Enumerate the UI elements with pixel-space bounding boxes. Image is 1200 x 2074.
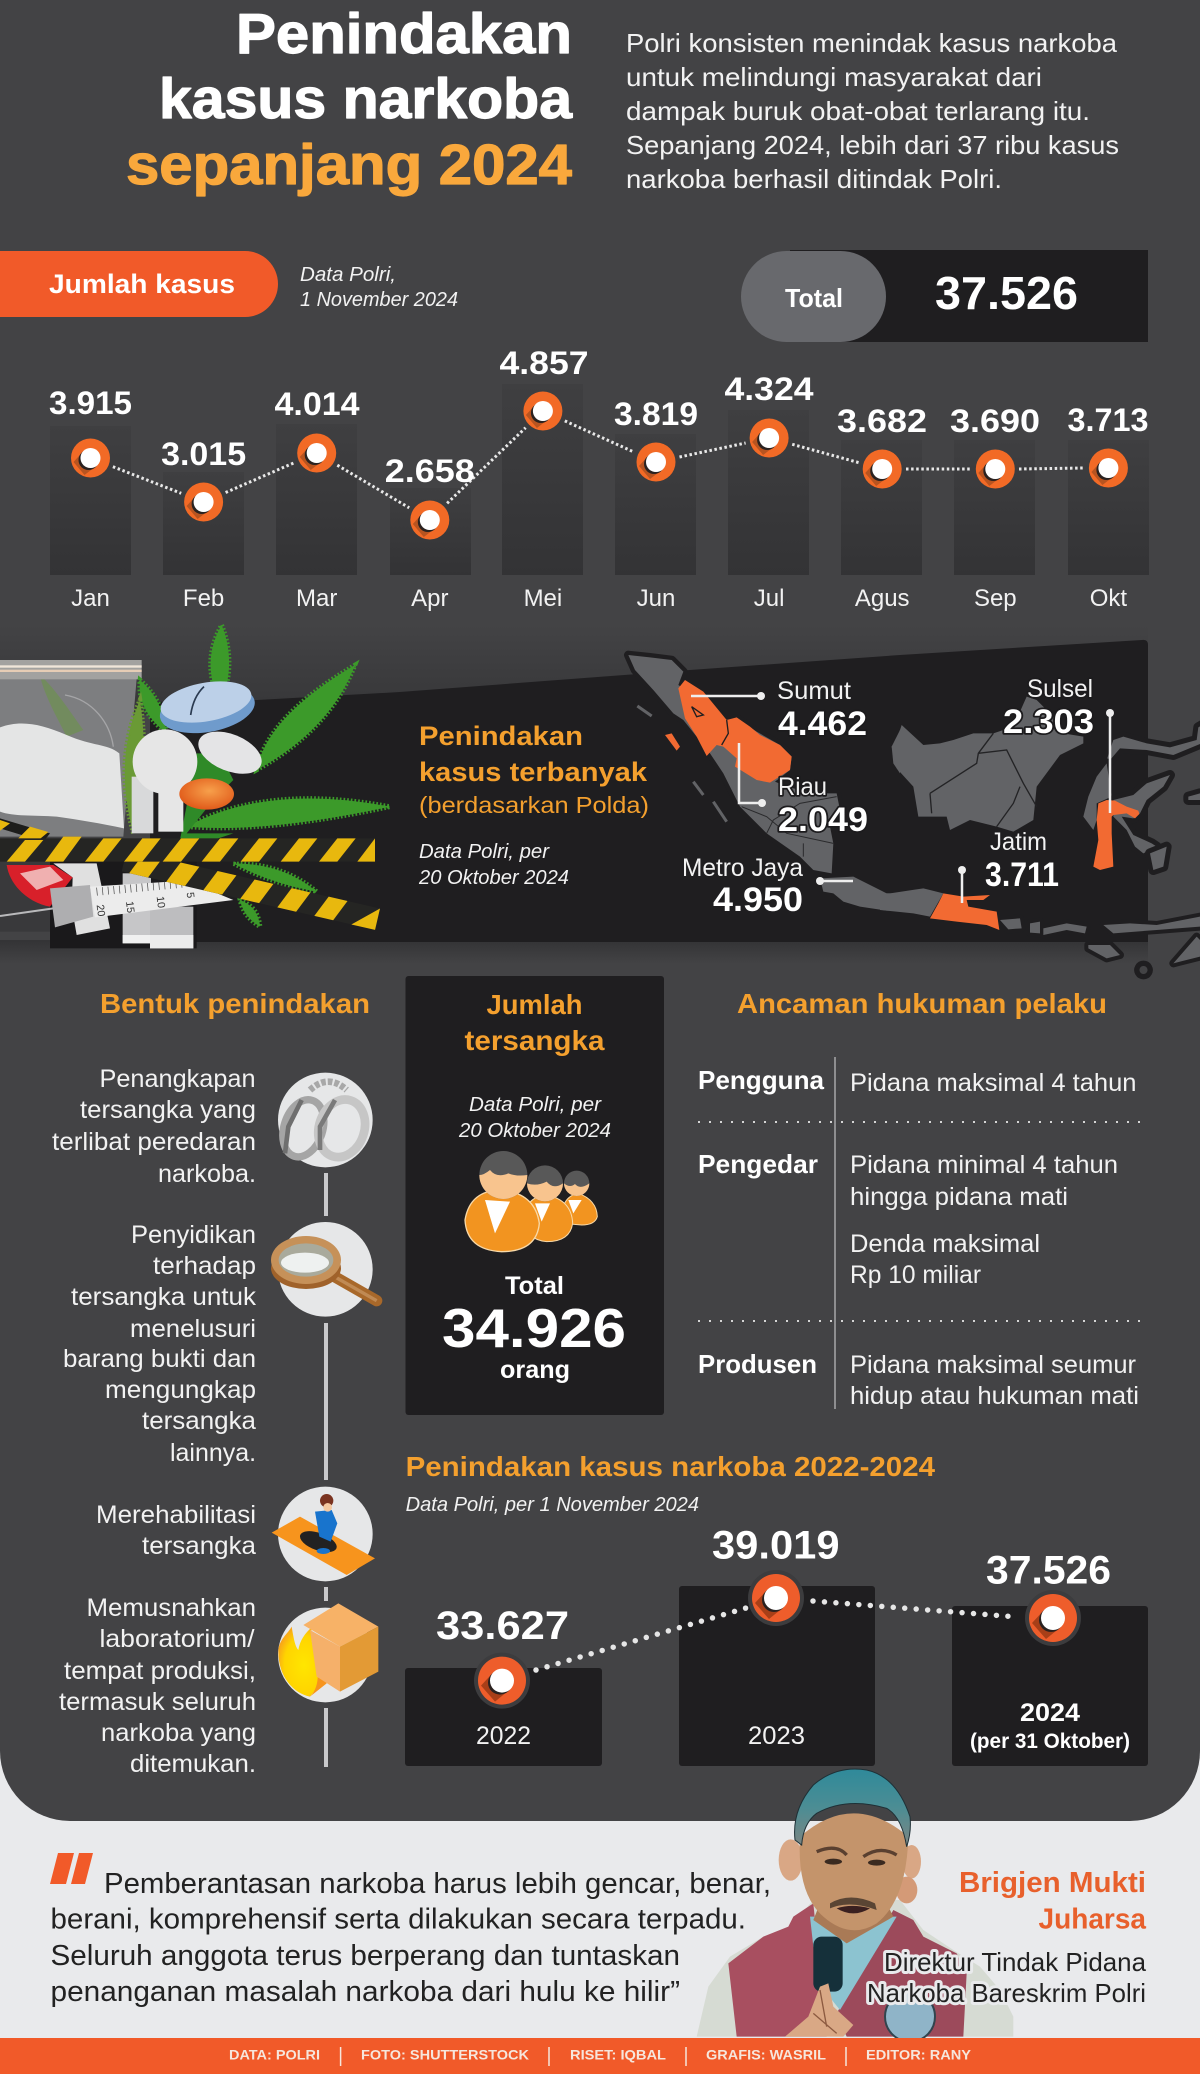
- monthly values: 3.819: [614, 396, 698, 432]
- penalties table: [698, 1057, 1146, 1410]
- panel heading: tersangka: [464, 1025, 605, 1056]
- text: Penyidikan: menelusuri: [130, 1315, 256, 1343]
- text: Memusnahkan: Memusnahkan: [86, 1594, 256, 1622]
- highlighted province: Sumut and Riau: [678, 680, 792, 783]
- text: Penyidikan: tersangka untuk: [71, 1283, 257, 1311]
- text: Penangkapan: Penangkapan: [100, 1065, 255, 1093]
- heading: Bentuk penindakan: Bentuk penindakan: [100, 988, 370, 1019]
- yearly values: [436, 1524, 1111, 1648]
- callout: Sulsel: [1003, 675, 1114, 813]
- title: sepanjang 2024: [126, 133, 572, 197]
- footer credits bar: GRAFIS: WASRIL: [706, 2046, 826, 2062]
- map of Indonesia: [628, 655, 1200, 977]
- police tape upper: [0, 818, 375, 862]
- chart bars: [50, 384, 1149, 575]
- speaker name: [959, 1867, 1147, 1936]
- callout: Riau: Riau: [778, 773, 827, 801]
- text: Penangkapan: tersangka yang: [80, 1096, 256, 1124]
- highlighted province: Jatim: [930, 893, 999, 930]
- capsule, vials and syringe: 20: [94, 904, 107, 917]
- heading: Penindakan kasus narkoba 2022-2024: Data Polri, per 1 November 2024: [406, 1494, 699, 1516]
- intro paragraph: narkoba berhasil ditindak Polri.: [626, 164, 1002, 194]
- quote text: Seluruh anggota terus berperang dan tuntaskan: [50, 1940, 680, 1972]
- text: Penyidikan: mengungkap: [105, 1376, 256, 1404]
- hair: [795, 1769, 910, 1847]
- title: [126, 2, 573, 197]
- illustration: drugs, syringe and police tape: [0, 625, 390, 948]
- title: Penindakan: [236, 2, 572, 66]
- callout: Metro Jaya: [682, 854, 853, 919]
- portrait: Brigjen Mukti Juharsa: [697, 1769, 1013, 2042]
- total badge: Total: [785, 283, 843, 313]
- text: Memusnahkan: [59, 1594, 256, 1778]
- dotted trend line: [113, 421, 1084, 508]
- month labels: Agus: [855, 585, 910, 612]
- highlighted province: Sulsel: [1093, 800, 1139, 870]
- year labels: 2022: [476, 1722, 531, 1750]
- capsule, vials and syringe: 15: [123, 901, 136, 914]
- row: Produsen: Pidana maksimal seumur: [850, 1351, 1136, 1379]
- panel data source note: [458, 1094, 611, 1142]
- text: Merehabilitasi: [96, 1501, 256, 1560]
- callout: Sumut: 4.462: [778, 705, 867, 743]
- data source note: 1 November 2024: [300, 289, 458, 311]
- speaker role: Direktur Tindak Pidana: [884, 1947, 1147, 1977]
- row: Pengedar: Pengedar: [698, 1149, 818, 1179]
- month labels: Jan: [71, 585, 110, 612]
- heading: Penindakan kasus terbanyak: (berdasarkan Polda): [419, 792, 649, 818]
- islands: Sumatra and west Java: [628, 655, 900, 911]
- row: Pengguna: Pengguna: [698, 1065, 825, 1095]
- text: Memusnahkan: ditemukan.: [130, 1750, 256, 1778]
- row: Produsen: hidup atau hukuman mati: [850, 1382, 1139, 1410]
- title: kasus narkoba: [159, 67, 573, 131]
- icon: rehabilitation figure on mat: [272, 1487, 375, 1581]
- intro paragraph: Sepanjang 2024, lebih dari 37 ribu kasus: [626, 130, 1119, 160]
- quote text: berani, komprehensif serta dilakukan secara terpadu.: [50, 1904, 746, 1936]
- total badge: [741, 250, 1148, 342]
- ears and hand: [779, 1839, 803, 1881]
- text: Memusnahkan: tempat produksi,: [64, 1657, 256, 1685]
- label pill: Jumlah kasus: Jumlah kasus: [49, 269, 235, 299]
- year labels: 2023: [748, 1722, 805, 1750]
- monthly values: [49, 345, 1148, 489]
- speaker name: Juharsa: [1038, 1904, 1147, 1936]
- speaker role: Narkoba Bareskrim Polri: [867, 1978, 1146, 2008]
- heading: Penindakan kasus terbanyak: [419, 721, 649, 818]
- total badge: 37.526: [935, 267, 1078, 319]
- callout: Sumut: Sumut: [777, 677, 851, 705]
- icon: magnifying glass: [271, 1222, 377, 1317]
- text: Penangkapan: [52, 1065, 256, 1188]
- heading: Penindakan kasus narkoba 2022-2024: Penindakan kasus narkoba 2022-2024: [406, 1451, 935, 1482]
- row: Produsen: Produsen: [698, 1349, 817, 1379]
- month labels: Sep: [974, 585, 1017, 612]
- eyes, mustache and mouth: [817, 1848, 897, 1857]
- text: Penangkapan: terlibat peredaran: [52, 1128, 256, 1156]
- row: Pengedar: Rp 10 miliar: [850, 1261, 981, 1289]
- text: Penyidikan: barang bukti dan: [63, 1345, 256, 1373]
- cannabis leaves: [125, 625, 390, 927]
- yearly values: 33.627: [436, 1604, 569, 1648]
- neck: [813, 1903, 893, 1943]
- row: Pengedar: [698, 1149, 1118, 1289]
- callout: Metro Jaya: 4.950: [713, 881, 803, 919]
- row: Pengedar: hingga pidana mati: [850, 1183, 1068, 1211]
- callout: Riau: [739, 743, 868, 839]
- month labels: Apr: [411, 585, 448, 612]
- text: Merehabilitasi: tersangka: [142, 1532, 256, 1560]
- month labels: Mei: [524, 585, 562, 612]
- shaded band above and below map: [0, 625, 1148, 964]
- text: Penyidikan: terhadap: [153, 1252, 256, 1280]
- text: Merehabilitasi: Merehabilitasi: [96, 1501, 256, 1529]
- month labels: Jul: [754, 585, 784, 612]
- text: Penangkapan: narkoba.: [158, 1160, 256, 1188]
- yearly dotted trend: [536, 1601, 1018, 1670]
- icon: burning box: [278, 1603, 378, 1702]
- callout: Metro Jaya: Metro Jaya: [682, 854, 803, 882]
- month labels: Feb: [183, 585, 224, 612]
- panel heading: [464, 989, 605, 1056]
- footer credits bar: DATA: POLRI: [229, 2046, 320, 2062]
- police tape lower: [122, 850, 380, 930]
- monthly values: 2.658: [385, 453, 475, 489]
- callout: Jatim: Jatim: [990, 828, 1047, 856]
- row: Pengguna: Pidana maksimal 4 tahun: [850, 1069, 1136, 1097]
- callout: Sulsel: Sulsel: [1027, 675, 1093, 703]
- month labels: [71, 585, 1127, 612]
- capsule, vials and syringe: 5: [184, 892, 196, 899]
- panel: Jumlah tersangka: [406, 976, 664, 1415]
- yearly chart: [405, 1524, 1148, 1766]
- jacket and vest: [697, 1900, 1013, 2037]
- capsule, vials and syringe: [0, 863, 233, 948]
- powder: [0, 723, 124, 828]
- yearly bars: [405, 1586, 1148, 1766]
- text: Penyidikan: tersangka: [142, 1407, 256, 1435]
- quote text: [50, 1868, 771, 2008]
- panel total: orang: [500, 1356, 570, 1384]
- heading: Penindakan kasus terbanyak: Penindakan: [419, 721, 583, 751]
- icon: handcuffs: [276, 1073, 373, 1167]
- data source note for map: Data Polri, per: [419, 841, 550, 863]
- quote text: penanganan masalah narkoba dari hulu ke hilir”: [50, 1976, 680, 2008]
- text: Memusnahkan: termasuk seluruh: [59, 1688, 256, 1716]
- data source note for map: [418, 841, 569, 889]
- year labels: 2024: [1020, 1699, 1080, 1727]
- monthly values: 3.915: [49, 385, 132, 421]
- intro paragraph: dampak buruk obat-obat terlarang itu.: [626, 96, 1090, 126]
- year labels: [476, 1699, 1130, 1753]
- capsule, vials and syringe: 10: [154, 896, 167, 909]
- panel heading: Jumlah: [486, 989, 582, 1020]
- text: Penyidikan: [63, 1221, 257, 1467]
- text: Memusnahkan: laboratorium/: [100, 1625, 255, 1653]
- monthly line chart: [49, 345, 1149, 612]
- footer credits bar: RISET: IQBAL: [570, 2046, 666, 2062]
- timeline connectors: [324, 1173, 328, 1767]
- heading: Penindakan kasus terbanyak: kasus terbanyak: [419, 757, 648, 787]
- heading: Ancaman hukuman pelaku: Ancaman hukuman pelaku: [737, 988, 1107, 1019]
- panel data source note: Data Polri, per: [469, 1094, 602, 1116]
- panel total: [442, 1272, 626, 1384]
- row: Produsen: [698, 1349, 1139, 1410]
- callout: Jatim: [958, 828, 1059, 903]
- quote mark: [50, 1853, 93, 1884]
- callout: Riau: 2.049: [778, 801, 868, 839]
- yearly markers: [474, 1570, 1081, 1709]
- monthly values: 3.713: [1068, 402, 1148, 438]
- monthly values: 3.015: [161, 436, 246, 472]
- row: Pengedar: Pidana minimal 4 tahun: [850, 1151, 1118, 1179]
- heading: Penindakan kasus narkoba 2022-2024: [406, 1451, 935, 1516]
- face: [800, 1813, 908, 1930]
- quote text: Pemberantasan narkoba harus lebih gencar, benar,: [104, 1868, 771, 1900]
- panel total: Total: [505, 1272, 564, 1300]
- plastic bag: [0, 660, 142, 837]
- intro paragraph: untuk melindungi masyarakat dari: [626, 62, 1042, 92]
- text: Memusnahkan: narkoba yang: [101, 1719, 256, 1747]
- monthly values: 3.682: [837, 403, 927, 439]
- year labels: (per 31 Oktober): [970, 1730, 1130, 1753]
- intro paragraph: Polri konsisten menindak kasus narkoba: [626, 28, 1118, 58]
- icon: three suspects: [465, 1151, 597, 1252]
- panel total: 34.926: [442, 1297, 626, 1359]
- monthly values: 4.857: [500, 345, 588, 381]
- row: Pengedar: Denda maksimal: [850, 1230, 1040, 1258]
- data source note: Data Polri,: [300, 264, 396, 286]
- footer credits bar: [0, 2038, 1200, 2074]
- monthly values: 3.690: [950, 403, 1040, 439]
- pills: [132, 675, 268, 833]
- callout: Sumut: [691, 677, 867, 743]
- monthly values: 4.324: [724, 371, 814, 407]
- text: Penyidikan: lainnya.: [170, 1439, 256, 1467]
- footer credits bar: EDITOR: RANY: [866, 2046, 972, 2062]
- yearly values: 39.019: [712, 1524, 840, 1568]
- data source note for map: 20 Oktober 2024: [418, 867, 569, 889]
- callout: Sulsel: 2.303: [1003, 703, 1094, 741]
- data markers: [71, 392, 1128, 540]
- panel data source note: 20 Oktober 2024: [458, 1120, 611, 1142]
- panel: dark map band: [150, 640, 1148, 942]
- speaker role: [867, 1947, 1147, 2008]
- intro paragraph: [626, 28, 1119, 194]
- monthly values: 4.014: [274, 386, 360, 422]
- data source note: [300, 264, 458, 311]
- month labels: Jun: [637, 585, 675, 612]
- month labels: Okt: [1090, 585, 1127, 612]
- footer credits bar: FOTO: SHUTTERSTOCK: [361, 2046, 529, 2062]
- callout: Jatim: 3.711: [985, 856, 1059, 894]
- row: Pengguna: [698, 1065, 1136, 1097]
- islands: Kalimantan, Java, Sulawesi and Nusa Tenggara: [880, 697, 1200, 977]
- text: Penyidikan: Penyidikan: [131, 1221, 256, 1249]
- label pill: Jumlah kasus: [0, 251, 278, 317]
- month labels: Mar: [296, 585, 337, 612]
- speaker name: Brigjen Mukti: [959, 1867, 1146, 1899]
- yearly values: 37.526: [986, 1548, 1111, 1592]
